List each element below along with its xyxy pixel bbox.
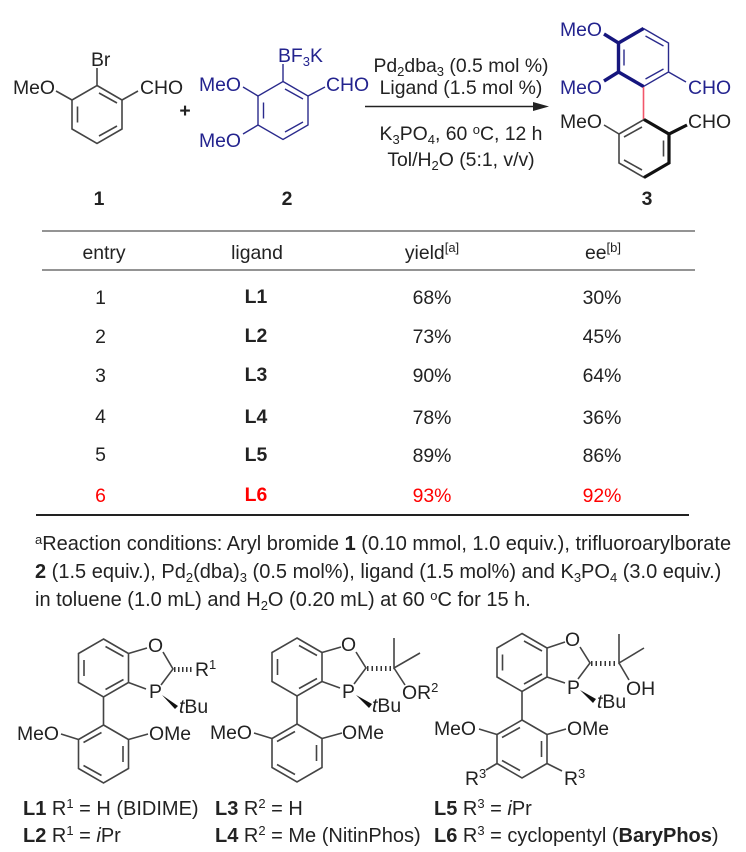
- footnote: o: [430, 588, 437, 603]
- compound 3: biaryl product: MeO: [560, 19, 602, 41]
- ligand L3/L4 captions: = H: [266, 798, 303, 820]
- table row 5: 86%: [583, 445, 621, 467]
- table header: [82, 240, 621, 264]
- ligand L1/L2 structure: R: [195, 659, 209, 681]
- compound 3: biaryl product: CHO: [688, 77, 731, 99]
- ligand L5/L6 captions: 3: [477, 796, 485, 811]
- ligand L5/L6 captions: =: [485, 798, 507, 820]
- ligand L3/L4 captions: 2: [258, 796, 266, 811]
- compound 2: trifluoroarylborate: K: [310, 45, 323, 67]
- table row 6 highlighted: 92%: [583, 485, 621, 507]
- ligand L5/L6 structure: 3: [479, 766, 486, 781]
- footnote: O (0.20 mL) at 60: [268, 589, 430, 611]
- ligand L1/L2 structure: tBu: [179, 696, 208, 718]
- ligand L1/L2 captions: 1: [66, 796, 74, 811]
- footnote: [35, 532, 731, 613]
- ligand L1/L2 captions: 1: [66, 823, 74, 838]
- table row 3: 64%: [583, 365, 621, 387]
- compound 3: biaryl product: MeO: [560, 111, 602, 133]
- ligand L3/L4 structure: OMe: [342, 722, 384, 744]
- table row 4: L4: [245, 406, 268, 428]
- compound 1: aryl bromide: [13, 49, 183, 144]
- reaction conditions below arrow: Tol/H: [387, 149, 432, 171]
- table row 1: L1: [245, 286, 268, 308]
- table row 1: 30%: [583, 287, 621, 309]
- ligand L5/L6 captions: BaryPhos): [619, 825, 719, 847]
- footnote: 2: [261, 598, 268, 613]
- ligand L5/L6 captions: 3: [477, 823, 485, 838]
- table row 5: [95, 444, 621, 467]
- compound labels: 1: [94, 188, 105, 210]
- ligand L3/L4 captions: L4 R: [215, 825, 258, 847]
- table row 3: 90%: [413, 365, 451, 387]
- compound 2: trifluoroarylborate: BF: [278, 45, 303, 67]
- footnote: 2: [186, 570, 193, 585]
- compound 1: aryl bromide: CHO: [140, 77, 183, 99]
- table row 4: 36%: [583, 407, 621, 429]
- reaction conditions above arrow: Ligand (1.5 mol %): [380, 77, 542, 99]
- plus sign: +: [179, 100, 191, 122]
- table row 1: 68%: [413, 287, 451, 309]
- table row 2: 2: [95, 326, 106, 348]
- footnote: in toluene (1.0 mL) and H: [35, 589, 261, 611]
- ligand L1/L2 captions: iPr: [96, 825, 121, 847]
- ligand L1/L2 structure: MeO: [17, 723, 59, 745]
- ligand L5/L6 structure: OMe: [567, 718, 609, 740]
- footnote: 1 (0.10 mmol, 1.0 equiv.), trifluoroarylborate: [345, 533, 731, 555]
- ligand L5/L6 captions: [434, 796, 719, 847]
- compound 2: trifluoroarylborate: CHO: [326, 74, 369, 96]
- ligand L5/L6 structure: O: [565, 629, 580, 651]
- ligand L1/L2 structure: OMe: [149, 723, 191, 745]
- footnote: 3: [574, 570, 581, 585]
- ligand L3/L4 captions: = Me (NitinPhos): [266, 825, 421, 847]
- reaction conditions below arrow: PO: [400, 123, 428, 145]
- reaction conditions below arrow: K: [380, 123, 392, 145]
- reaction conditions below arrow: C, 12 h: [480, 123, 542, 145]
- reaction conditions above arrow: 3: [437, 64, 444, 79]
- footnote: 2 (1.5 equiv.), Pd: [35, 561, 186, 583]
- reaction conditions above arrow: dba: [404, 55, 437, 77]
- ligand L5/L6 structure: P: [567, 677, 580, 699]
- reaction conditions below arrow: 2: [432, 158, 439, 173]
- ligand L3/L4 structure: 2: [431, 680, 438, 695]
- reaction conditions above arrow: Pd: [373, 55, 397, 77]
- ligand L5/L6 structure: [434, 629, 655, 790]
- ligand L5/L6 structure: 3: [578, 766, 585, 781]
- compound 2: trifluoroarylborate: [199, 45, 369, 152]
- reaction conditions below arrow: o: [473, 122, 480, 137]
- ligand L1/L2 structure: 1: [209, 657, 216, 672]
- reaction conditions above arrow: 2: [397, 64, 404, 79]
- ligand L3/L4 structure: MeO: [210, 722, 252, 744]
- compound 1: aryl bromide: MeO: [13, 77, 55, 99]
- ligand L5/L6 captions: = cyclopentyl (: [485, 825, 619, 847]
- footnote: a: [35, 532, 43, 547]
- table row 6 highlighted: 6: [95, 485, 106, 507]
- ligand L3/L4 structure: P: [342, 681, 355, 703]
- table row 4: [95, 406, 621, 429]
- ligand L5/L6 captions: iPr: [507, 798, 532, 820]
- compound labels: 2: [282, 188, 292, 210]
- compound labels: [94, 188, 653, 210]
- reaction conditions below arrow: O (5:1, v/v): [439, 149, 535, 171]
- table row 4: 78%: [413, 407, 451, 429]
- table row 6 highlighted: 93%: [413, 485, 451, 507]
- ligand L1/L2 structure: [17, 635, 216, 783]
- reaction conditions below arrow: 3: [392, 132, 400, 147]
- ligand L1/L2 structure: P: [149, 681, 162, 703]
- ligand L1/L2 captions: [23, 796, 199, 847]
- footnote: 3: [240, 570, 247, 585]
- footnote: (3.0 equiv.): [617, 561, 721, 583]
- table row 4: 4: [95, 406, 106, 428]
- ligand L3/L4 captions: L3 R: [215, 798, 258, 820]
- footnote: Reaction conditions: Aryl bromide: [42, 533, 345, 555]
- arrow: [365, 102, 549, 111]
- ligand L3/L4 captions: 2: [258, 823, 266, 838]
- ligand L5/L6 structure: MeO: [434, 718, 476, 740]
- compound labels: 3: [642, 188, 653, 210]
- ligand L1/L2 structure: O: [148, 635, 163, 657]
- table header: [b]: [607, 240, 621, 255]
- ligand L5/L6 structure: OH: [626, 678, 655, 700]
- ligand L1/L2 captions: L1 R: [23, 798, 66, 820]
- footnote: C for 15 h.: [437, 589, 531, 611]
- reaction conditions below arrow: 4: [428, 132, 435, 147]
- table row 5: 5: [95, 444, 106, 466]
- table header: entry: [82, 242, 126, 264]
- ligand L5/L6 structure: R: [564, 768, 578, 790]
- ligand L3/L4 structure: OR: [402, 682, 431, 704]
- ligand L1/L2 captions: =: [74, 825, 96, 847]
- table row 3: [95, 364, 621, 387]
- ligand L1/L2 captions: L2 R: [23, 825, 66, 847]
- table row 5: L5: [245, 444, 268, 466]
- compound 3: biaryl product: CHO: [688, 111, 731, 133]
- table row 3: L3: [245, 364, 268, 386]
- ligand L5/L6 captions: L6 R: [434, 825, 477, 847]
- compound 3: biaryl product: MeO: [560, 77, 602, 99]
- table header: [a]: [445, 240, 459, 255]
- ligand L5/L6 structure: R: [465, 768, 479, 790]
- ligand L3/L4 captions: [215, 796, 421, 847]
- table row 2: L2: [245, 325, 267, 347]
- table row 3: 3: [95, 365, 106, 387]
- table header: ee: [585, 242, 607, 264]
- table row 2: 45%: [583, 326, 621, 348]
- ligand L3/L4 structure: tBu: [372, 695, 401, 717]
- ligand L1/L2 captions: = H (BIDIME): [74, 798, 199, 820]
- table header: yield: [405, 242, 445, 264]
- table row 1: [95, 286, 621, 309]
- footnote: 4: [610, 570, 617, 585]
- footnote: (dba): [193, 561, 240, 583]
- table: [36, 231, 695, 515]
- ligand L5/L6 structure: tBu: [597, 691, 626, 713]
- compound 2: trifluoroarylborate: 3: [303, 54, 310, 69]
- reaction conditions above arrow: [373, 55, 549, 99]
- compound 2: trifluoroarylborate: MeO: [199, 130, 241, 152]
- table row 6 highlighted: L6: [245, 484, 268, 506]
- table row 6 highlighted: [95, 484, 621, 507]
- table row 2: [95, 325, 621, 348]
- ligand L5/L6 captions: L5 R: [434, 798, 477, 820]
- ligand L3/L4 structure: O: [341, 634, 356, 656]
- reaction conditions above arrow: (0.5 mol %): [444, 55, 549, 77]
- table row 2: 73%: [413, 326, 451, 348]
- compound 2: trifluoroarylborate: MeO: [199, 74, 241, 96]
- footnote: (0.5 mol%), ligand (1.5 mol%) and K: [247, 561, 574, 583]
- footnote: PO: [581, 561, 610, 583]
- table row 5: 89%: [413, 445, 451, 467]
- table row 1: 1: [95, 287, 106, 309]
- reaction conditions below arrow: [380, 122, 542, 173]
- reaction conditions below arrow: , 60: [435, 123, 473, 145]
- ligand L3/L4 structure: [210, 634, 438, 782]
- compound 1: aryl bromide: Br: [91, 49, 111, 71]
- table header: ligand: [231, 242, 283, 264]
- compound 3: biaryl product: [560, 19, 731, 178]
